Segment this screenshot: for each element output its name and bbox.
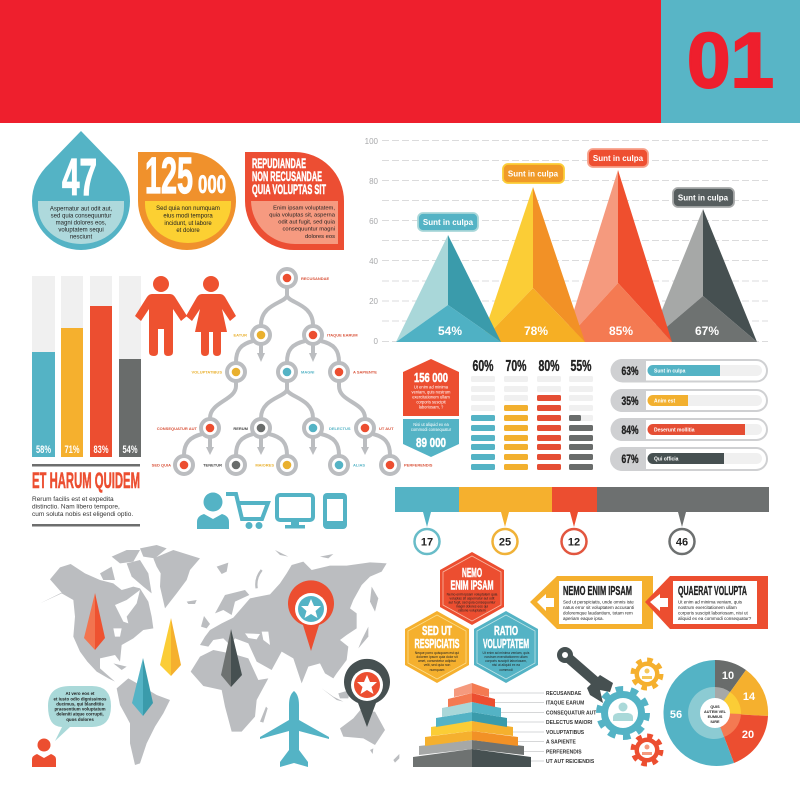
pyramid chart <box>413 683 596 767</box>
tree labels: ITAQUE EARUM <box>327 332 358 338</box>
hexagon: sed ut respiciatis: dolorem ipsum quia dolor sit <box>416 655 458 659</box>
hexagon: ratio voluptatem: nostrum exercitationem ullam <box>484 655 528 659</box>
speech bubble: praesentium voluptatum <box>54 706 106 712</box>
tag: nemo enim ipsam: doloremque laudantium, totam rem <box>563 610 633 616</box>
ladder percentages: 70% <box>506 358 526 375</box>
icon row <box>197 492 347 529</box>
progress: 63%: Sunt in culpa <box>654 368 686 374</box>
map pin: star on red <box>288 580 334 651</box>
teal drop callout: nesciunt <box>70 234 93 240</box>
red leaf callout: dolores eos <box>305 234 335 240</box>
icon: phone <box>323 493 347 529</box>
speech bubble: At vero eos et <box>65 691 95 696</box>
ladder red cells <box>537 395 561 470</box>
tree labels: ALIAS <box>353 462 365 468</box>
progress: 35%: Anim est <box>654 398 675 404</box>
pyramid tier labels: DELECTUS MAIORI <box>546 720 593 726</box>
icon: airplane <box>260 691 329 767</box>
tree labels: TENETUR <box>203 462 222 468</box>
hexagon: nemo enim ipsam: magni dolores eos qui <box>456 604 488 608</box>
speech bubble: deleniti atque corrupti, <box>56 712 104 716</box>
orange number callout: eius modi tempora <box>163 214 213 220</box>
progress: 84%: Deserunt mollitia <box>654 428 695 434</box>
pyramid: red 85% <box>564 149 672 342</box>
hexagon: sed ut respiciatis: numquam <box>430 668 445 672</box>
donut inner ring <box>688 687 741 739</box>
tag: quaerat volupta: Ut enim ad minima veniam, quis <box>678 600 743 604</box>
hexagon stats: Ut enim ad minima <box>414 384 449 390</box>
hexagon stats: corporis suscipit <box>416 400 447 404</box>
donut chart: AUTEM VEL <box>704 710 727 714</box>
hexagon: sed ut respiciatis: amet, consectetur adipisci <box>418 659 456 663</box>
pyramid: red 85%: 85% <box>609 324 633 338</box>
pyramid tier labels: ITAQUE EARUM <box>546 700 584 706</box>
gear: small red <box>633 736 661 764</box>
marker: 25 <box>492 512 518 554</box>
pyramid tier labels: CONSEQUATUR AUT <box>546 710 596 716</box>
pyramid: gray 67% <box>649 188 757 342</box>
hexagon: ratio voluptatem: VOLUPTATEM <box>483 636 529 651</box>
hexagon: nemo enim ipsam: aut fugit, sed quia consequuntur <box>449 600 496 604</box>
hexagon stats: 89 000 <box>416 435 446 450</box>
text block: et harum quidem: Rerum facilis est et expedita <box>32 496 114 503</box>
ladder teal cells <box>471 415 495 470</box>
icon: monitor <box>277 495 313 528</box>
teal drop callout: sed quia consequuntur <box>51 214 111 220</box>
tree labels: EATUR <box>234 332 247 338</box>
hexagon: nemo enim ipsam: Nemo enim ipsam voluptatem quia <box>447 592 498 596</box>
donut chart <box>663 660 768 766</box>
pyramid tier labels: A SAPIENTE <box>546 740 576 746</box>
teal drop callout: magni dolores eos, <box>56 220 107 226</box>
chart grid and axis: 20 <box>369 297 379 306</box>
map pin: gray kite <box>221 629 242 687</box>
red leaf callout: quia voluptas sit, asperna <box>269 212 336 218</box>
segmented bar <box>395 487 769 554</box>
progress: 35% <box>610 389 767 412</box>
icon: speaker person <box>32 738 56 767</box>
pyramid: orange 78%: 78% <box>524 324 548 338</box>
tree labels: DELECTUS <box>329 426 351 431</box>
pyramid: gray 67%: Sunt in culpa <box>678 194 729 202</box>
pyramid: red 85%: Sunt in culpa <box>593 154 644 163</box>
hexagon stats: laboriosam, ? <box>419 404 444 410</box>
pyramid: gray 67%: 67% <box>695 324 719 338</box>
progress bars <box>610 359 767 471</box>
tag: quaerat volupta: QUAERAT VOLUPTA <box>678 584 747 598</box>
hexagon stats: veniam, quis nostrum <box>412 390 451 394</box>
marker: 46: 46 <box>676 536 688 548</box>
speech bubble: quos dolores <box>66 717 94 722</box>
tag: quaerat volupta: nostrum exercitationem ullam <box>678 605 737 610</box>
donut chart: 56 <box>670 709 682 721</box>
hexagon stats <box>403 359 459 457</box>
hexagon: ratio voluptatem <box>474 611 538 683</box>
world map <box>40 545 399 765</box>
tree diagram <box>152 269 433 474</box>
text block: et harum quidem: distinctio. Nam libero tempore, <box>32 504 120 510</box>
teal drop callout: Aspernatur aut odit aut, <box>50 206 113 212</box>
continents <box>40 545 399 765</box>
orange number callout: et dolore <box>176 228 200 234</box>
tag: nemo enim ipsam: NEMO ENIM IPSAM <box>563 584 632 598</box>
tree labels: PERFERENDIS <box>404 462 433 468</box>
tree nodes <box>175 269 399 474</box>
teal drop callout: 47 <box>62 149 97 207</box>
red leaf callout <box>245 152 344 250</box>
orange number callout: 000 <box>198 171 226 199</box>
chart: pyramid percentages <box>365 137 768 346</box>
chart grid and axis <box>365 137 768 346</box>
tree labels: VOLUPTATIBUS <box>191 370 222 374</box>
chart grid and axis: 80 <box>369 177 379 186</box>
progress: 67%: 67% <box>622 452 639 466</box>
ladder percentages: 80% <box>538 358 560 375</box>
gear: large teal <box>599 689 647 737</box>
marker: 25: 25 <box>499 536 511 548</box>
hexagon: ratio voluptatem: nisi ut aliquid ex ea <box>492 663 520 667</box>
orange number callout <box>138 147 236 250</box>
donut chart: 14 <box>743 691 756 703</box>
hexagon: nemo enim ipsam: voluptas sit aspernatur aut odit <box>450 596 495 600</box>
tag: quaerat volupta <box>645 576 768 629</box>
hexagon: ratio voluptatem: commodi <box>499 668 513 672</box>
hexagon: sed ut respiciatis: velit, sed quia non <box>424 663 450 667</box>
text block: et harum quidem: ET HARUM QUIDEM <box>32 468 140 493</box>
orange number callout: 125 <box>145 147 193 204</box>
tree labels: CONSEQUATUR AUT <box>157 426 198 431</box>
hexagon: sed ut respiciatis <box>405 611 469 683</box>
chart grid and axis: 100 <box>365 137 379 146</box>
tree labels: RECUSANDAE <box>301 276 330 281</box>
icon: man <box>135 276 187 356</box>
hexagon stats: 156 000 <box>414 370 448 385</box>
donut chart: EUMIUS <box>708 715 723 719</box>
pyramid: orange 78%: Sunt in culpa <box>508 170 559 178</box>
pyramid tier labels <box>489 691 596 765</box>
vertical bar chart: 71% <box>64 444 80 456</box>
tree labels: MAGNI <box>301 370 314 374</box>
icon: cart <box>226 494 268 529</box>
icon: person <box>197 492 229 529</box>
red leaf callout: consequuntur magni <box>282 226 335 232</box>
chart grid and axis: 60 <box>369 217 379 226</box>
tree arrowheads <box>206 353 369 455</box>
ladder percentages <box>472 358 592 375</box>
donut chart: 20 <box>742 729 754 741</box>
orange number callout: incidunt, ut labore <box>164 221 212 227</box>
tag: nemo enim ipsam: aperiam eaque ipsa. <box>563 616 604 621</box>
marker: 17: 17 <box>421 536 433 548</box>
tree connectors <box>184 288 390 455</box>
tree labels: UT AUT <box>379 426 394 431</box>
red leaf callout: REPUDIANDAE <box>252 156 306 171</box>
hexagon stats: commodi consequatur <box>411 427 452 432</box>
tag: quaerat volupta: aliquid ex ea commodi consequatur? <box>678 616 752 621</box>
marker: 17 <box>414 512 440 554</box>
pyramid tiers <box>413 683 531 767</box>
hexagon: nemo enim ipsam: ENIM IPSAM <box>450 578 494 592</box>
text block: et harum quidem <box>32 464 140 526</box>
hexagon: ratio voluptatem: Ut enim ad minima veniam, quis <box>483 651 530 655</box>
tree labels: MAIORES <box>255 462 274 468</box>
tree labels: SED QUIA <box>152 462 171 468</box>
speech bubble: et iusto odio dignissimos <box>54 696 107 702</box>
hexagon: sed ut respiciatis: SED UT <box>422 623 452 638</box>
tree labels: RERUM <box>233 426 249 431</box>
progress: 84% <box>610 418 767 441</box>
speech bubble: ducimus, qui blanditiis <box>56 702 104 706</box>
pyramid tier labels: VOLUPTATIBUS <box>546 730 585 736</box>
tag: nemo enim ipsam <box>530 576 653 629</box>
pyramid: teal 54%: 54% <box>438 324 462 338</box>
orange number callout: Sed quia non numquam <box>156 206 220 212</box>
map pin: star on dark <box>344 659 390 727</box>
donut chart: IURE <box>710 720 720 724</box>
marker: 12: 12 <box>568 536 580 548</box>
speech bubble <box>48 686 111 741</box>
tag: quaerat volupta: corporis suscipit laboriosam, nisi ut <box>678 610 749 616</box>
hexagon: nemo enim ipsam: ratione voluptatem <box>458 608 486 612</box>
progress: 84%: 84% <box>622 423 639 437</box>
pyramid: orange 78% <box>481 164 585 342</box>
teal drop callout <box>32 131 130 250</box>
vertical bar chart: 83% <box>94 444 109 456</box>
page number: 01 <box>687 16 774 104</box>
marker: 46 <box>670 512 694 554</box>
hexagon: sed ut respiciatis: Neque porro quisquam est qui <box>415 651 459 655</box>
pyramid tier labels: PERFERENDIS <box>546 750 582 756</box>
hexagon: sed ut respiciatis: RESPICIATIS <box>414 636 460 651</box>
icon: woman <box>186 276 236 356</box>
progress: 35%: 35% <box>622 394 639 408</box>
donut chart: QUIS <box>710 705 720 709</box>
text block: et harum quidem: cum soluta nobis est eligendi optio. <box>32 511 133 518</box>
tag: nemo enim ipsam: natus error sit voluptatem accusanti <box>563 605 634 610</box>
red leaf callout: NON RECUSANDAE <box>252 169 322 184</box>
header banner <box>0 0 800 123</box>
tree labels: A SAPIENTE <box>353 370 377 374</box>
pyramid tier labels: UT AUT REICIENDIS <box>546 759 595 765</box>
hexagon: nemo enim ipsam <box>440 552 504 625</box>
map pin: yellow kite <box>160 618 181 676</box>
vertical bar chart: 58% <box>36 444 51 456</box>
vertical bar chart: 54% <box>122 444 138 456</box>
teal drop callout: voluptatem sequi <box>58 228 104 234</box>
ladder percentages: 55% <box>570 358 592 375</box>
gear: small yellow <box>633 660 661 688</box>
pyramid: teal 54%: Sunt in culpa <box>423 218 474 227</box>
pyramid tier labels: RECUSANDAE <box>546 691 582 697</box>
progress: 67% <box>610 447 767 471</box>
hexagon: ratio voluptatem: RATIO <box>494 623 518 638</box>
ladder gray cells <box>569 415 593 470</box>
hexagon stats: Nisi ut aliquid ex ea <box>413 422 449 427</box>
map pin: teal kite <box>132 658 153 716</box>
vertical bar chart <box>32 276 141 457</box>
ladder yellow cells <box>504 405 528 470</box>
icon: wrench <box>557 647 613 703</box>
ladder empty cells <box>471 376 593 421</box>
map pin: red kite <box>84 593 105 650</box>
progress: 63%: 63% <box>622 364 639 378</box>
hexagon: nemo enim ipsam: NEMO <box>462 565 482 580</box>
ladder chart <box>471 358 593 470</box>
hexagon: ratio voluptatem: corporis suscipit laboriosam, <box>485 659 527 663</box>
tree labels <box>152 276 433 468</box>
red leaf callout: Enim ipsam voluptatem, <box>273 206 335 212</box>
donut chart: 10 <box>722 670 734 682</box>
map water gaps <box>113 590 270 645</box>
red leaf callout: odit aut fugit, sed quia <box>278 220 336 226</box>
chart grid and axis: 40 <box>369 257 379 266</box>
tag: nemo enim ipsam: Sed ut perspiciatis, unde omnis iste <box>563 600 634 604</box>
red leaf callout: QUIA VOLUPTAS SIT <box>252 182 326 197</box>
hexagon stats: exercitationem ullam <box>412 394 450 400</box>
marker: 12 <box>562 512 586 554</box>
progress: 67%: Qui officia <box>654 456 679 462</box>
progress: 63% <box>610 359 767 382</box>
chart grid and axis: 0 <box>374 337 379 346</box>
ladder percentages: 60% <box>472 358 494 375</box>
pyramid: teal 54% <box>396 213 501 342</box>
